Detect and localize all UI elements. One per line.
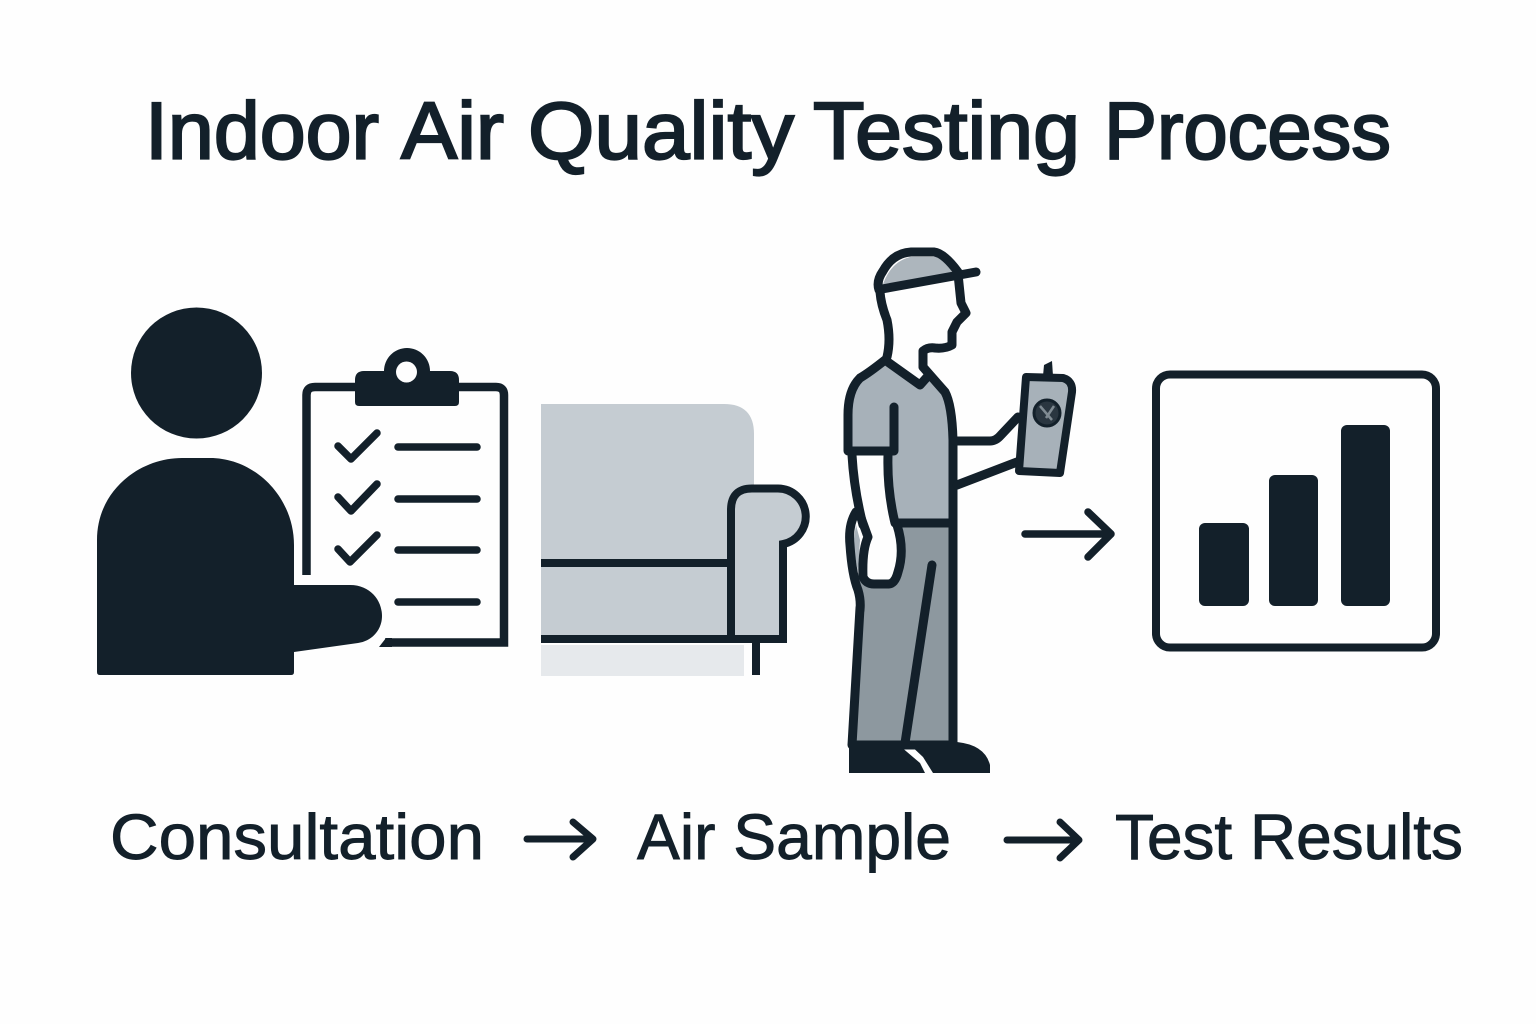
shirt fill [850,362,953,523]
trousers fill [855,525,950,742]
icon: technician with air sampler [848,252,1072,773]
arrow: air sample to test results [1007,822,1079,858]
arrow: consultation to air sample [527,822,593,857]
hanging arm and hand [852,455,863,525]
title: Process [1104,86,1391,176]
icon: person body [97,458,382,675]
trousers [852,523,953,745]
title: Air [401,86,504,176]
arrow: to results icon [1025,512,1111,557]
label: consultation: Consultation [110,801,484,873]
cap [878,252,958,290]
head and face [880,292,889,357]
title: Testing [813,86,1080,176]
icon: sofa [541,404,807,676]
sofa outlines [541,488,806,675]
bar 1 [1199,523,1249,606]
icon: bar chart results [1156,374,1436,648]
sofa back and seat [541,404,807,636]
air sampler device [1019,361,1072,473]
title [145,86,1391,176]
shirt [848,360,953,523]
icon: person head [131,308,262,438]
icon: consultation person with clipboard [97,308,504,675]
cap fill [882,257,952,287]
arm holding device [955,417,1018,441]
bar 3 [1341,425,1390,606]
shoes [849,746,925,773]
arm sliver fill [853,525,860,572]
label: air sample: Air Sample [637,801,951,873]
label: test results: Test Results [1115,801,1463,873]
icon: clipboard [306,348,504,647]
bar 2 [1269,475,1318,606]
title: Quality [528,86,795,176]
sofa floor shadow [541,645,744,676]
checklist marks [338,433,477,602]
chart frame [1156,374,1436,648]
title: Indoor [145,86,379,176]
figure outlines [848,252,1018,745]
